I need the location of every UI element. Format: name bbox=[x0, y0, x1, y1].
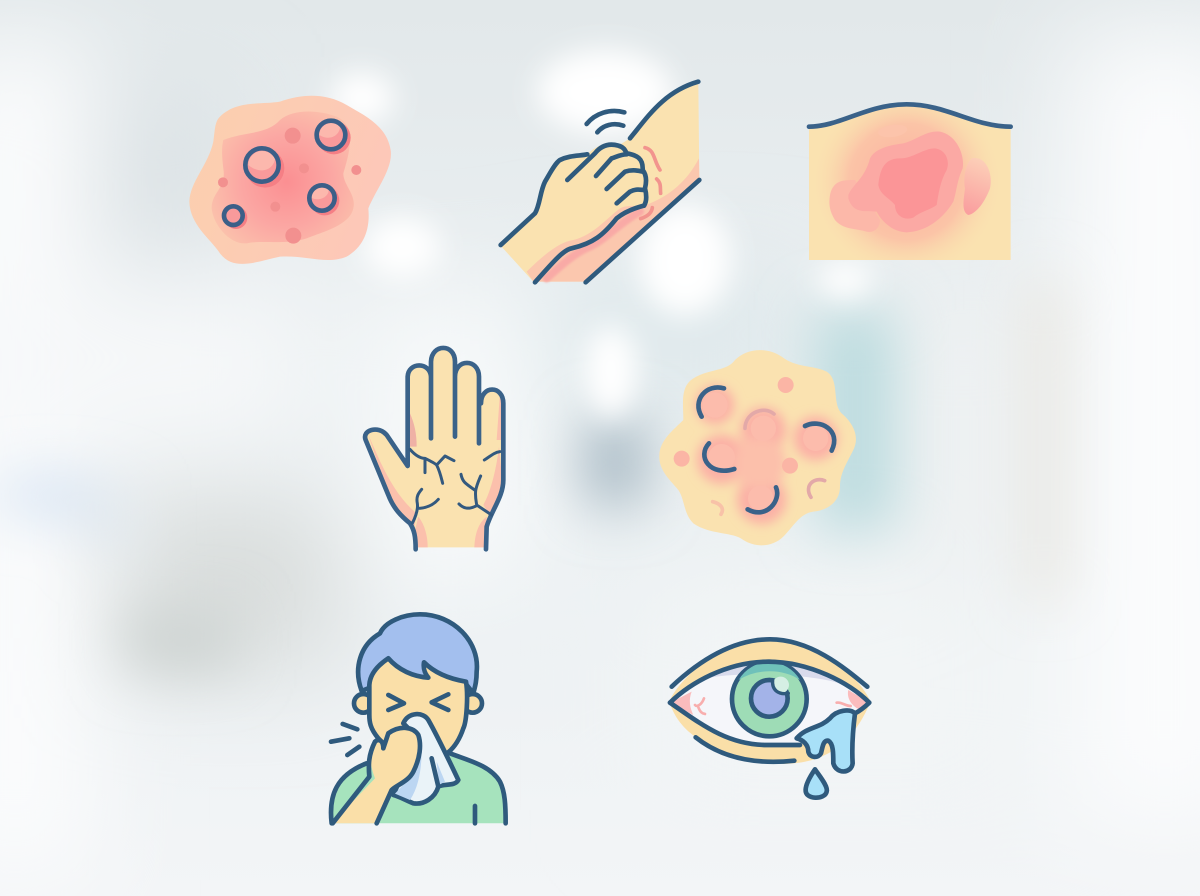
tissue bbox=[393, 714, 458, 804]
icon: person sneezing into a tissue bbox=[330, 614, 506, 823]
highlight bbox=[772, 677, 789, 694]
icon: hand scratching arm bbox=[500, 82, 699, 282]
skin with wavy top bbox=[809, 104, 1011, 260]
rash spots bbox=[218, 128, 361, 244]
hair bbox=[358, 614, 477, 693]
tissue shadow and crease bbox=[395, 748, 445, 800]
hand outlines bbox=[501, 82, 699, 282]
falling drop bbox=[806, 769, 827, 798]
bumps bbox=[702, 392, 828, 511]
cracks bbox=[410, 449, 500, 523]
lid shadow bbox=[703, 663, 847, 687]
eye and lid outlines bbox=[670, 639, 869, 762]
icon: red rash with blisters bbox=[189, 96, 391, 264]
bloodshot corners bbox=[671, 690, 869, 715]
pink edge of arm bbox=[527, 158, 699, 282]
side welt bbox=[963, 158, 991, 215]
red centre bbox=[878, 148, 948, 219]
hand fill bbox=[365, 348, 503, 547]
iris top shading bbox=[739, 662, 800, 680]
icon: watery red eye bbox=[669, 639, 871, 798]
icon: acne bumps on skin bbox=[659, 350, 856, 545]
pink palm edges bbox=[368, 393, 502, 547]
ears bbox=[354, 694, 482, 713]
green shirt bbox=[330, 753, 506, 823]
iris bbox=[732, 662, 807, 736]
squeezed eyes bbox=[388, 694, 448, 710]
tear stream bbox=[797, 711, 855, 771]
small pale patch bbox=[877, 123, 908, 139]
icon: inflamed skin patch bbox=[809, 104, 1011, 260]
dark arcs around bumps bbox=[698, 387, 834, 512]
raised arm outline bbox=[333, 728, 420, 823]
faded pink arcs bbox=[713, 410, 825, 514]
arm and hand skin bbox=[500, 82, 699, 282]
raised arm fill bbox=[332, 728, 420, 823]
scratch marks bbox=[641, 148, 661, 219]
shirt outline bbox=[331, 753, 506, 823]
sneeze lines bbox=[331, 724, 359, 755]
left lobe bbox=[829, 180, 880, 232]
hand outline bbox=[365, 348, 503, 549]
pink halos bbox=[696, 386, 838, 524]
eye white bbox=[670, 662, 869, 745]
rash outer skin patch bbox=[189, 96, 391, 264]
pupil bbox=[751, 680, 788, 717]
face bbox=[369, 658, 467, 765]
rash inner inflamed area bbox=[212, 111, 354, 243]
blisters bbox=[224, 121, 351, 229]
yellow eyelids bbox=[669, 639, 871, 764]
inflamed halo bbox=[809, 104, 1011, 260]
inflamed stripe bbox=[547, 212, 640, 278]
scalloped skin patch bbox=[659, 350, 856, 545]
skin surface line bbox=[809, 104, 1011, 127]
mid red layer bbox=[848, 131, 963, 232]
small spots bbox=[674, 377, 798, 474]
icon: dry cracked hand bbox=[365, 348, 503, 549]
